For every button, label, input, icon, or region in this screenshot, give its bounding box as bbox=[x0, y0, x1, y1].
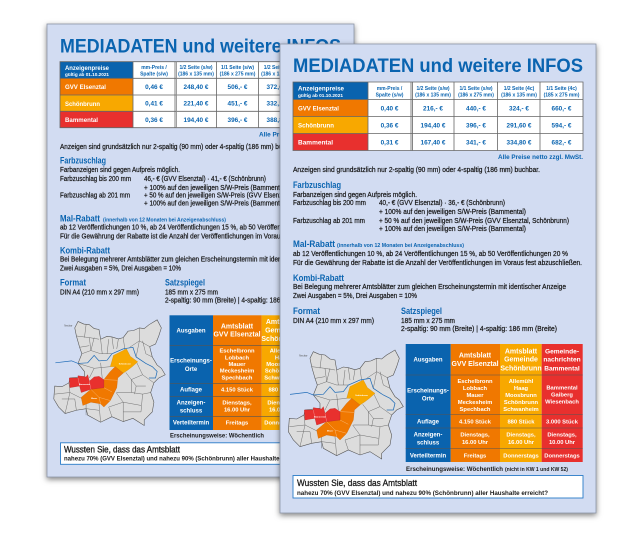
distribution table: front page: 3.000 Stück bbox=[546, 419, 579, 425]
price table: back page: 332,10 € bbox=[267, 100, 292, 108]
price table: front page: 194,40 € bbox=[421, 122, 446, 130]
section: Kombi-Rabatt front: Kombi-Rabatt bbox=[293, 273, 344, 283]
distribution table: back page: Anzeigen- bbox=[177, 400, 205, 406]
distribution table: back page: Moosbrunn bbox=[266, 362, 298, 368]
price table: back page: 1/2 Seite (4c) bbox=[264, 65, 295, 71]
distribution table: back page: Eschelbronn bbox=[219, 349, 255, 355]
price table: front page: 440,- € bbox=[466, 106, 486, 112]
section: Farbzuschlag back: Farbanzeigen sind gegen Aufpreis möglich. bbox=[60, 167, 180, 174]
callout: back page: nahezu 70% (GVV Elsenztal) und nahezu 90% (Schönbrunn) aller Haushalte erreicht? bbox=[64, 455, 307, 462]
distribution table: front page: 880 Stück bbox=[507, 419, 535, 425]
price table: front page: mm-Preis / bbox=[377, 86, 403, 92]
price table: front page: 334,80 € bbox=[507, 140, 532, 146]
section: Farbzuschlag front: + 100% auf den jeweiligen S/W-Preis (Bammental) bbox=[379, 226, 526, 233]
section: Mal-Rabatt front: (innerhalb von 12 Monaten bei Anzeigenabschluss) bbox=[337, 243, 464, 249]
distribution table: front page: Schwanheim bbox=[503, 407, 539, 413]
price table: back page: Bammental bbox=[65, 117, 98, 124]
price table: front page: 324,- € bbox=[509, 106, 529, 112]
map: back page: Schönbrunn bbox=[119, 362, 132, 365]
map: front page bbox=[288, 350, 403, 459]
price table: front page: 0,36 € bbox=[381, 122, 399, 130]
distribution table: front page: Moosbrunn bbox=[505, 393, 537, 399]
section: Farbzuschlag front: Farbanzeigen sind gegen Aufpreis möglich. bbox=[293, 192, 417, 199]
price table: front page: 1/2 Seite (4c) bbox=[504, 86, 535, 92]
distribution table: back page: Spechbach bbox=[222, 375, 253, 381]
distribution table: back page: Meckesheim bbox=[220, 369, 254, 375]
distribution table: back page: Orte bbox=[185, 367, 198, 373]
price table: back page: GVV Elsenztal bbox=[65, 84, 106, 91]
price table: front page: 216,- € bbox=[423, 106, 443, 112]
distribution table: front page bbox=[406, 344, 583, 462]
callout: back page bbox=[60, 443, 342, 464]
distribution table: front page: Gaiberg bbox=[551, 393, 573, 399]
section: Kombi-Rabatt front bbox=[293, 273, 566, 300]
distribution table: front page: Freitags bbox=[464, 453, 486, 459]
publication note: front page: (nicht in KW 1 und KW 52) bbox=[505, 467, 568, 473]
section: Farbzuschlag back: Farbzuschlag ab 201 mm bbox=[60, 192, 130, 200]
distribution table: front page: 16.00 Uhr bbox=[462, 440, 489, 446]
price table: front page: (186 x 135 mm) bbox=[501, 92, 537, 98]
price table: back page: (186 x 135 mm) bbox=[261, 72, 297, 78]
title: back page: MEDIADATEN und weitere INFOS bbox=[60, 37, 341, 58]
price table: back page: mm-Preis / bbox=[141, 65, 167, 71]
price table: front page: 1/1 Seite (s/w) bbox=[459, 86, 493, 92]
distribution table: front page: Schönbrunn bbox=[500, 365, 542, 372]
section: Farbzuschlag front: Farbzuschlag ab 201 mm bbox=[293, 218, 365, 225]
distribution table: back page: Freitags bbox=[226, 421, 248, 427]
section: Kombi-Rabatt back bbox=[60, 245, 325, 273]
price table: front page: (186 x 135 mm) bbox=[415, 92, 451, 98]
section: Farbzuschlag front bbox=[293, 180, 569, 233]
section: Farbzuschlag back: 46,- € (GVV Elsenztal) · 41,- € (Schönbrunn) bbox=[144, 176, 266, 183]
distribution table: front page: Meckesheim bbox=[458, 400, 492, 406]
distribution table: back page: Mauer bbox=[228, 362, 246, 368]
section: Mal-Rabatt back: ab 12 Veröffentlichungen 10 %, ab 24 Veröffentlichungen 15 %, ab 50 Veröffentlichungen 20 % bbox=[60, 224, 326, 231]
distribution table: front page: Donnerstags bbox=[544, 453, 580, 459]
price table: back page: Spalte (s/w) bbox=[140, 72, 168, 78]
distribution table: front page: Allemühl bbox=[509, 379, 534, 385]
price table: back page: 396,- € bbox=[228, 117, 248, 124]
distribution table: back page: 880 Stück bbox=[268, 388, 296, 394]
panel: front page bbox=[280, 44, 596, 513]
section: Kombi-Rabatt front: Bei Belegung mehrerer Amtsblätter zum gleichen Erscheinungstermin mit identischer Anzeige bbox=[293, 284, 566, 291]
distribution table: front page: Erscheinungs- bbox=[407, 388, 449, 394]
section: format back: 2-spaltig: 90 mm (Breite) | 4-spaltig: 186 mm (Breite) bbox=[165, 298, 316, 305]
map: front page: Mauer bbox=[327, 431, 333, 433]
distribution table: front page: Lobbach bbox=[463, 386, 488, 392]
section: format front: 185 mm x 275 mm bbox=[401, 318, 455, 325]
section: format front: Format bbox=[293, 306, 320, 316]
intro text: back page: Anzeigen sind grundsätzlich nur 2-spaltig (90 mm) oder 4-spaltig (186 mm) buchbar. bbox=[60, 144, 300, 151]
title: front page: MEDIADATEN und weitere INFOS bbox=[293, 55, 583, 77]
price table: front page: 341,- € bbox=[466, 140, 486, 146]
distribution table: front page: schluss bbox=[417, 440, 440, 446]
distribution table: back page: Ausgaben bbox=[176, 329, 206, 335]
distribution table: back page: Gemeinde bbox=[265, 328, 299, 334]
price table: back page: (186 x 135 mm) bbox=[178, 72, 214, 78]
callout: back page: Wussten Sie, dass das Amtsblatt bbox=[64, 445, 180, 455]
price table: back page: Schönbrunn bbox=[65, 101, 100, 108]
distribution table: back page: Schönbrunn bbox=[261, 336, 303, 343]
price table: front page: 594,- € bbox=[552, 122, 572, 130]
price table: front page: Anzeigenpreise bbox=[298, 86, 344, 92]
section: Farbzuschlag front: 40,- € (GVV Elsenztal) · 36,- € (Schönbrunn) bbox=[379, 200, 505, 207]
distribution table: front page: 16.00 Uhr bbox=[508, 440, 535, 446]
price table: front page bbox=[293, 82, 583, 150]
publication note: front page bbox=[406, 466, 568, 473]
section: format front: DIN A4 (210 mm x 297 mm) bbox=[293, 318, 374, 325]
map: front page: Neckar bbox=[299, 354, 308, 358]
distribution table: front page: Amtsblatt bbox=[459, 352, 492, 359]
section: Mal-Rabatt front: Für die Gewährung der Rabatte ist die Anzahl der Veröffentlichungen im Voraus fest abzuschließen. bbox=[293, 260, 582, 267]
distribution table: front page: Eschelbronn bbox=[457, 379, 493, 385]
price table: front page: (185 x 275 mm) bbox=[544, 92, 580, 98]
section: Kombi-Rabatt back: Kombi-Rabatt bbox=[60, 245, 110, 255]
price table: back page: (186 x 275 mm) bbox=[220, 72, 256, 78]
price table: back page: 0,36 € bbox=[145, 117, 163, 124]
section: Mal-Rabatt back: (innerhalb von 12 Monaten bei Anzeigenabschluss) bbox=[103, 218, 226, 224]
callout: front page bbox=[293, 476, 583, 498]
price table: back page: 451,- € bbox=[228, 100, 248, 108]
distribution table: front page: Orte bbox=[422, 397, 435, 403]
price note: front page: Alle Preise netto zzgl. MwSt. bbox=[498, 154, 583, 161]
map: front page: Bammental bbox=[314, 415, 326, 418]
price table: back page: 248,40 € bbox=[184, 84, 209, 91]
section: Farbzuschlag back: + 100% auf den jeweiligen S/W-Preis (Bammental) bbox=[144, 185, 287, 192]
price table: front page: 1/2 Seite (s/w) bbox=[416, 86, 450, 92]
section: format front bbox=[293, 306, 557, 333]
price table: front page: 660,- € bbox=[552, 106, 572, 112]
distribution table: back page: Amtsblatt bbox=[266, 319, 299, 326]
callout: front page: nahezu 70% (GVV Elsenztal) und nahezu 90% (Schönbrunn) aller Haushalte erreicht? bbox=[297, 490, 548, 497]
price note: back page: Alle Preise netto zzgl. MwSt. bbox=[259, 132, 345, 139]
distribution table: back page: GVV Elsenztal bbox=[213, 332, 261, 339]
section: format back: DIN A4 (210 mm x 297 mm) bbox=[60, 289, 139, 296]
section: Mal-Rabatt back bbox=[60, 214, 340, 240]
distribution table: back page: Haag bbox=[275, 356, 290, 362]
distribution table: front page: Gemeinde bbox=[504, 357, 538, 364]
price table: front page: gültig ab 01.10.2021 bbox=[298, 93, 343, 98]
price table: back page: gültig ab 01.10.2021 bbox=[65, 72, 109, 77]
section: Kombi-Rabatt back: Bei Belegung mehrerer Amtsblätter zum gleichen Erscheinungstermin mit identischer Anzeige bbox=[60, 257, 325, 264]
section: format back: 185 mm x 275 mm bbox=[165, 289, 218, 296]
distribution table: back page bbox=[170, 315, 342, 430]
section: format front: Satzspiegel bbox=[401, 306, 442, 316]
section: Farbzuschlag back: Farbzuschlag bbox=[60, 156, 106, 166]
map: back page: Neckar bbox=[64, 323, 73, 327]
section: Mal-Rabatt back: Mal-Rabatt bbox=[60, 214, 100, 224]
distribution table: front page: Bammental bbox=[544, 365, 580, 372]
section: Farbzuschlag front: Farbzuschlag bis 200 mm bbox=[293, 200, 366, 207]
publication note: front page: Erscheinungsweise: Wöchentlich bbox=[406, 466, 503, 473]
distribution table: back page: Schwanheim bbox=[264, 375, 300, 381]
distribution table: front page: Donnerstags bbox=[503, 453, 539, 459]
price table: back page: 194,40 € bbox=[184, 117, 209, 124]
price table: front page: 167,40 € bbox=[421, 140, 446, 146]
section: format front: 2-spaltig: 90 mm (Breite) | 4-spaltig: 186 mm (Breite) bbox=[401, 326, 557, 333]
map: front page: Schönbrunn bbox=[355, 395, 369, 397]
price table: back page: 1/2 Seite (s/w) bbox=[179, 65, 213, 71]
price table: front page: 396,- € bbox=[466, 122, 486, 130]
distribution table: front page: Dienstags, bbox=[506, 433, 536, 439]
distribution table: front page: Verteiltermin bbox=[410, 453, 447, 459]
distribution table: front page: Wiesenbach bbox=[545, 400, 579, 406]
distribution table: front page: Gemeinde- bbox=[545, 348, 579, 355]
distribution table: front page: Ausgaben bbox=[413, 358, 443, 364]
intro text: front page: Anzeigen sind grundsätzlich nur 2-spaltig (90 mm) oder 4-spaltig (186 mm) buchbar. bbox=[293, 167, 540, 174]
distribution table: back page: schluss bbox=[180, 408, 203, 414]
price table: front page: GVV Elsenztal bbox=[298, 106, 339, 112]
map: back page: Bammental bbox=[79, 383, 90, 386]
section: Mal-Rabatt back: Für die Gewährung der Rabatte ist die Anzahl der Veröffentlichungen im Voraus fest abzuschließen. bbox=[60, 233, 340, 240]
price table: back page: Anzeigenpreise bbox=[65, 65, 109, 72]
section: Farbzuschlag back: + 50 % auf den jeweiligen S/W-Preis (GVV Elsenztal, Schönbrunn) bbox=[144, 192, 328, 200]
section: format back bbox=[60, 278, 316, 305]
price table: front page: 0,40 € bbox=[381, 106, 399, 112]
distribution table: front page: 4.150 Stück bbox=[459, 419, 492, 425]
distribution table: back page: Schönbrunn bbox=[265, 369, 300, 375]
price table: front page: 1/1 Seite (4c) bbox=[546, 86, 577, 92]
price table: front page: Spalte (s/w) bbox=[376, 92, 404, 98]
section: Kombi-Rabatt back: Zwei Ausgaben = 5%, Drei Ausgaben = 10% bbox=[60, 266, 181, 273]
distribution table: back page: 16.00 Uhr bbox=[269, 408, 296, 414]
price table: front page: (186 x 275 mm) bbox=[458, 92, 494, 98]
price table: back page: 0,46 € bbox=[145, 84, 163, 91]
price table: back page: 388,80 € bbox=[267, 117, 292, 124]
distribution table: back page: Erscheinungs- bbox=[170, 359, 212, 365]
section: Farbzuschlag front: + 100% auf den jeweiligen S/W-Preis (Bammental) bbox=[379, 209, 526, 216]
distribution table: back page: Lobbach bbox=[225, 356, 250, 362]
distribution table: front page: Dienstags, bbox=[547, 433, 577, 439]
map: back page bbox=[54, 320, 165, 425]
section: Mal-Rabatt front: Mal-Rabatt bbox=[293, 239, 335, 249]
price table: back page: 221,40 € bbox=[184, 100, 209, 108]
distribution table: front page: Spechbach bbox=[460, 407, 491, 413]
distribution table: back page: Allemühl bbox=[270, 349, 295, 355]
distribution table: back page: 16.00 Uhr bbox=[224, 408, 251, 414]
section: Mal-Rabatt front: ab 12 Veröffentlichungen 10 %, ab 24 Veröffentlichungen 15 %, ab 50 Veröffentlichungen 20 % bbox=[293, 251, 568, 258]
distribution table: front page: GVV Elsenztal bbox=[451, 361, 499, 368]
distribution table: back page: 4.150 Stück bbox=[221, 388, 254, 394]
price table: front page: 682,- € bbox=[552, 140, 572, 146]
panel: back page bbox=[47, 24, 354, 477]
publication note: back page: Erscheinungsweise: Wöchentlich bbox=[170, 432, 264, 439]
distribution table: front page: Schönbrunn bbox=[504, 400, 539, 406]
price table: front page: 0,31 € bbox=[381, 140, 399, 146]
distribution table: front page: Dienstags, bbox=[460, 433, 490, 439]
distribution table: back page: Dienstags, bbox=[267, 400, 297, 406]
distribution table: back page: Amtsblatt bbox=[221, 323, 254, 330]
distribution table: back page: Dienstags, bbox=[222, 400, 252, 406]
distribution table: back page: Verteiltermin bbox=[173, 421, 210, 427]
distribution table: front page: 10.00 Uhr bbox=[549, 440, 576, 446]
price table: back page bbox=[60, 62, 342, 128]
distribution table: front page: Haag bbox=[514, 386, 529, 392]
section: Farbzuschlag back: + 100% auf den jeweiligen S/W-Preis (Bammental) bbox=[144, 201, 287, 208]
distribution table: back page: Auflage bbox=[180, 388, 203, 394]
section: Kombi-Rabatt front: Zwei Ausgaben = 5%, Drei Ausgaben = 10% bbox=[293, 293, 417, 300]
section: format back: Format bbox=[60, 278, 86, 288]
distribution table: front page: Anzeigen- bbox=[414, 433, 442, 439]
distribution table: front page: Mauer bbox=[466, 393, 484, 399]
section: Farbzuschlag front: Farbzuschlag bbox=[293, 180, 341, 190]
distribution table: front page: nachrichten bbox=[543, 357, 581, 364]
price table: front page: 291,60 € bbox=[507, 122, 532, 130]
price table: back page: 0,41 € bbox=[145, 100, 163, 108]
section: Farbzuschlag back bbox=[60, 156, 328, 208]
price table: front page: Schönbrunn bbox=[298, 122, 334, 130]
section: format back: Satzspiegel bbox=[165, 278, 205, 288]
price table: back page: 372,60 € bbox=[267, 84, 292, 91]
price table: front page: Bammental bbox=[298, 140, 333, 146]
callout: front page: Wussten Sie, dass das Amtsblatt bbox=[297, 478, 417, 488]
section: Farbzuschlag front: + 50 % auf den jeweiligen S/W-Preis (GVV Elsenztal, Schönbrunn) bbox=[379, 218, 569, 225]
distribution table: back page: Donnerstags bbox=[264, 421, 300, 427]
distribution table: front page: Amtsblatt bbox=[505, 348, 538, 355]
price table: back page: 1/1 Seite (s/w) bbox=[221, 65, 254, 71]
section: Mal-Rabatt front bbox=[293, 239, 582, 267]
map: back page: Mauer bbox=[91, 397, 97, 400]
price table: back page: 506,- € bbox=[228, 84, 248, 91]
section: Farbzuschlag back: Farbzuschlag bis 200 mm bbox=[60, 176, 131, 183]
distribution table: front page: Bammental bbox=[546, 385, 578, 391]
distribution table: front page: Auflage bbox=[417, 419, 440, 425]
